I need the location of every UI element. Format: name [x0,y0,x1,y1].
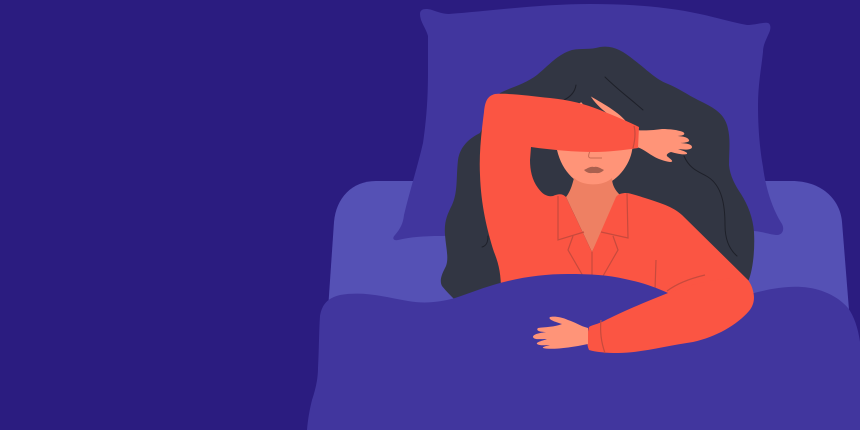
lips [584,167,604,173]
lower hand [533,317,588,349]
pyjama seams and collar [558,126,656,290]
hair [441,47,754,300]
raised hand [636,129,692,162]
face [557,96,633,187]
sleeve seams [601,275,705,353]
bed headboard [328,181,849,310]
shirt body and raised arm [480,94,754,302]
hair strands [482,77,737,256]
pillow [393,4,783,240]
blanket [307,274,860,430]
nose [589,151,602,158]
lower arm sleeve [587,279,754,353]
hair fringe [581,95,608,114]
neck [566,178,620,252]
